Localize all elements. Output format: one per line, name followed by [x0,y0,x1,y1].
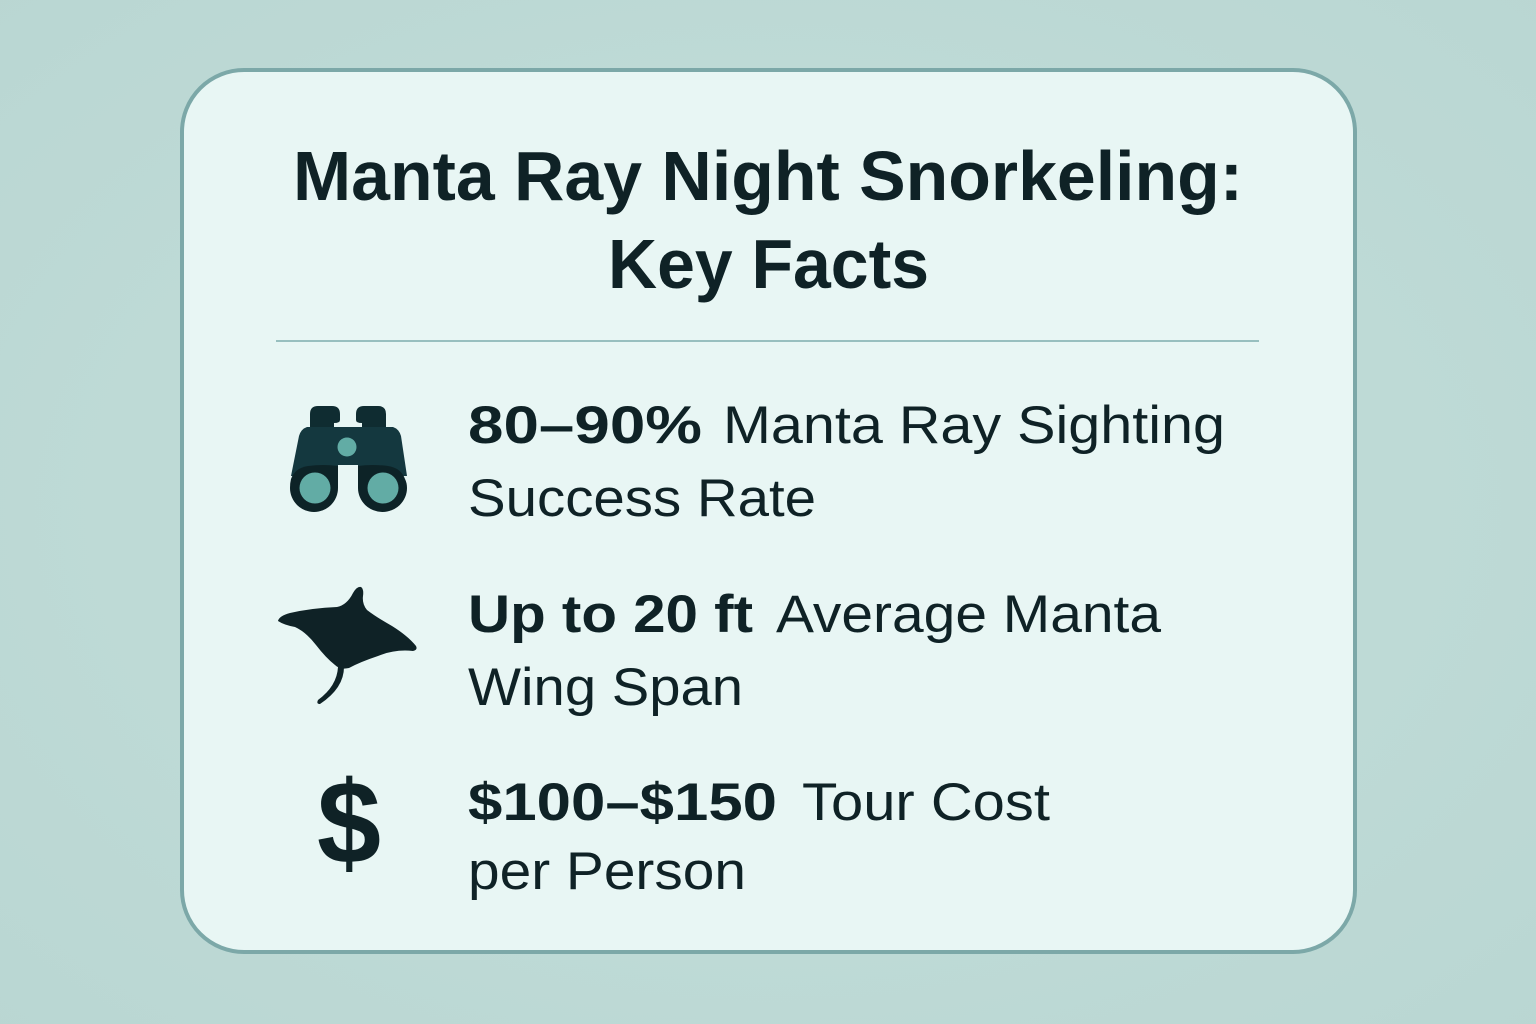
icon: dollar sign: $ [317,757,381,889]
icon: manta ray [278,587,417,704]
text: sighting rate [468,396,1225,528]
text: sighting rate: Success Rate [468,469,816,528]
text: wing span: Wing Span [468,658,743,717]
title: Manta Ray Night Snorkeling: [293,137,1243,215]
text: sighting rate: Manta Ray Sighting [723,396,1225,455]
panel: key facts card [182,70,1355,952]
text: wing span: Up to 20 ft [468,585,753,644]
text: sighting rate: 80–90% [468,396,702,455]
text: tour cost: $100–$150 [468,773,777,832]
text: tour cost: per Person [468,842,746,901]
text: tour cost [468,773,1050,901]
title: Key Facts [608,225,929,303]
text: tour cost: Tour Cost [802,773,1050,832]
text: wing span: Average Manta [776,585,1162,644]
title [293,137,1243,303]
icon: binoculars [290,406,407,512]
text: wing span [468,585,1162,717]
